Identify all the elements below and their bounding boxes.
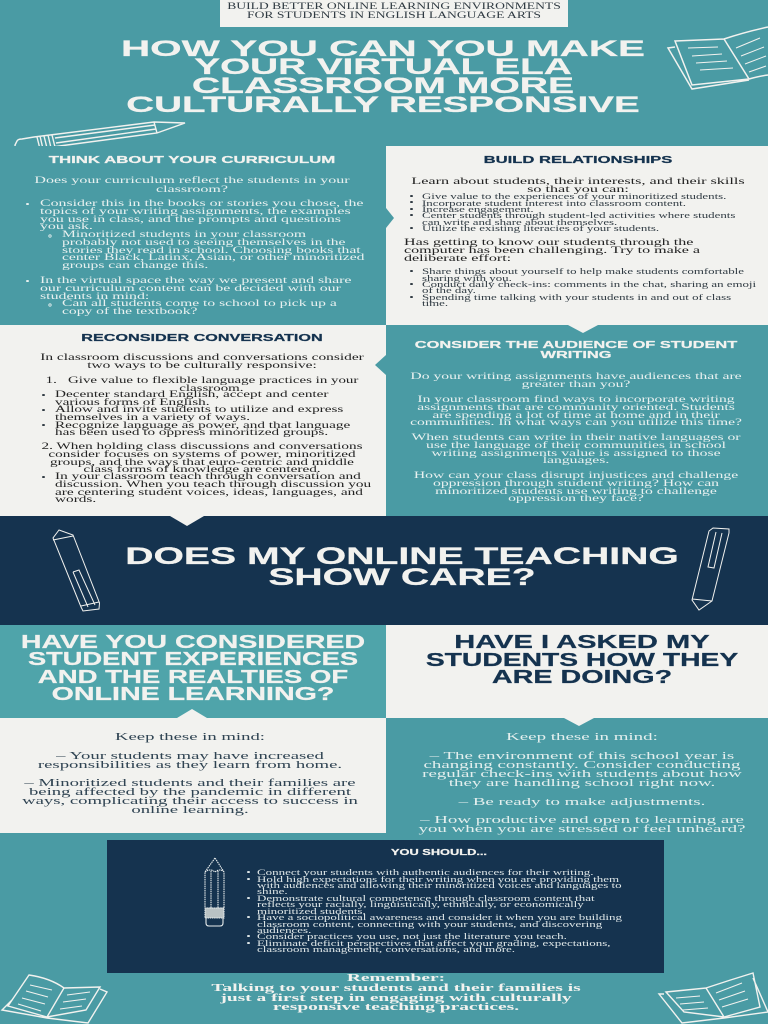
intro <box>411 177 745 195</box>
bullet list: probably not used to seeing themselves in the <box>62 238 345 248</box>
text: getting to know <box>404 238 700 264</box>
paragraph 4: oppression through student writing? How can <box>433 479 719 489</box>
paragraph 4: How can your class disrupt injustices and challenge <box>414 471 738 481</box>
title: HOW YOU CAN YOU MAKE <box>121 36 645 61</box>
bullet list: In the virtual space the way we present and share <box>40 276 351 286</box>
panel: you should <box>107 840 664 973</box>
heading: CONSIDER THE AUDIENCE OF STUDENT <box>415 339 737 351</box>
heading: WRITING <box>541 348 611 360</box>
text: getting to know: computer has been challenging. Try to make a <box>404 246 700 256</box>
heading: STUDENTS HOW THEY <box>426 649 738 670</box>
icon: pencil <box>204 858 225 926</box>
list: value: Incorporate student interest into classroom content. <box>422 199 686 208</box>
paragraph 4 <box>414 471 738 504</box>
point 2: online learning. <box>131 805 249 816</box>
heading: DOES MY ONLINE TEACHING <box>125 543 679 570</box>
list: language: various forms of English. <box>55 398 210 408</box>
numbered point 2: 2. When holding class discussions and conversations <box>42 442 362 452</box>
numbered point 1: 1. Give value to flexible language practices in your <box>46 376 358 386</box>
heading <box>125 543 679 591</box>
list: value: Give value to the experiences of your minoritized students. <box>422 192 726 201</box>
text: getting to know: Has getting to know our students through the <box>404 238 693 248</box>
bullet list <box>247 868 622 954</box>
list: language: themselves in a variety of ways. <box>55 413 250 423</box>
point 1: – The environment of this school year is <box>430 751 734 762</box>
bullet list: Consider this in the books or stories you chose, the <box>40 199 363 209</box>
bullet list: center Black, Latinx, Asian, or other minoritized <box>62 253 364 263</box>
point 2: ways, complicating their access to success in <box>22 796 358 807</box>
list: value: Increase engagement. <box>422 205 534 214</box>
list: value: can write and share about themselves. <box>422 218 617 227</box>
intro question <box>34 176 350 195</box>
point 2: – Be ready to make adjustments. <box>459 797 705 808</box>
banner: subtitle: BUILD BETTER ONLINE LEARNING ENVIRONMENTS <box>227 2 561 12</box>
heading: THINK ABOUT YOUR CURRICULUM <box>49 154 335 166</box>
bullet list: Have a sociopolitical awareness and consider it when you are building <box>257 913 622 922</box>
numbered point 2: groups, and the ways that euro-centric and middle <box>50 458 354 468</box>
list: teach through discussion: are centering student voices, ideas, languages, and <box>55 488 363 498</box>
heading: HAVE I ASKED MY <box>454 631 710 652</box>
panel: have I asked heading <box>386 625 768 718</box>
bullet list: with audiences and allowing their minoritized voices and languages to <box>257 881 622 890</box>
panel: build relationships <box>386 146 768 325</box>
paragraph 1: greater than you? <box>522 380 630 390</box>
intro: two ways to be culturally responsive: <box>87 361 317 371</box>
title: CLASSROOM MORE <box>192 73 574 98</box>
icon: open book bottom left <box>0 974 108 1024</box>
bullet list: Minoritized students in your classroom <box>62 230 306 240</box>
arrow: pointing down <box>568 325 598 333</box>
intro: In classroom discussions and conversations consider <box>40 353 364 363</box>
subheading: Keep these in mind: <box>115 732 265 743</box>
list: effort: Share things about yourself to help make students comfortable <box>422 267 744 276</box>
bullet list: copy of the textbook? <box>62 307 197 317</box>
bullet list: groups can change this. <box>62 261 208 271</box>
heading: AND THE REALTIES OF <box>37 666 348 687</box>
point 2: being affected by the pandemic in different <box>29 787 351 798</box>
paragraph 3: languages. <box>543 456 609 466</box>
paragraph 3: writing assignments value is assigned to those <box>431 449 721 459</box>
point 1: changing constantly. Consider conducting <box>424 760 740 771</box>
subheading: Keep these in mind: <box>506 732 658 743</box>
intro question: Does your curriculum reflect the students in your <box>34 176 350 186</box>
bullet list: stories they read in school. Choosing books that <box>62 246 361 256</box>
list: effort: of the day. <box>422 286 476 295</box>
list: value: Utilize the existing literacies of your students. <box>422 224 659 233</box>
paragraph 2 <box>410 395 742 428</box>
text: remember: Talking to your students and their families is <box>211 983 581 994</box>
title <box>121 36 645 117</box>
list: effort <box>410 267 756 308</box>
icon: open book top right <box>666 26 768 90</box>
point 1: – Your students may have increased <box>56 751 324 762</box>
bullet list: audiences. <box>257 926 311 935</box>
heading: ONLINE LEARNING? <box>51 683 334 704</box>
intro: so that you can: <box>527 185 629 195</box>
heading: HAVE YOU CONSIDERED <box>20 631 365 652</box>
bullet list: classroom management, conversations, and more. <box>257 945 515 954</box>
title: CULTURALLY RESPONSIVE <box>126 92 640 117</box>
list: teach through discussion <box>42 472 371 505</box>
arrow: pointing left <box>375 355 386 375</box>
banner: subtitle: FOR STUDENTS IN ENGLISH LANGUAGE ARTS <box>247 11 541 21</box>
text: remember <box>211 973 581 1013</box>
panel: consider the audience <box>386 325 768 516</box>
paragraph 2: assignments that are community oriented. Students <box>417 403 735 413</box>
paragraph 3: use the language of their communities in school <box>426 441 726 451</box>
bullet list: classroom content, connecting with your students, and discovering <box>257 920 602 929</box>
paragraph 3: When students can write in their native languages or <box>411 433 741 443</box>
bullet list: Connect your students with authentic audiences for their writing. <box>257 868 594 877</box>
point 2 <box>22 778 358 816</box>
heading: BUILD RELATIONSHIPS <box>484 154 672 166</box>
paragraph 2: are spending a lot of time at home and in their <box>432 411 720 421</box>
arrow: pointing up <box>177 709 207 718</box>
heading <box>415 339 738 360</box>
paragraph 4: oppression they face? <box>508 494 644 504</box>
list: effort: Conduct daily check-ins: comments in the chat, sharing an emoji <box>422 280 756 289</box>
intro <box>40 353 364 371</box>
bullet list: reflects your racially, linguistically, ethnically, or economically <box>257 900 584 909</box>
point 1: they are handling school right now. <box>449 778 715 789</box>
paragraph 1 <box>410 372 742 390</box>
heading: YOU SHOULD... <box>391 848 487 857</box>
panel: keep these in mind right <box>386 718 768 835</box>
bullet list: shine. <box>257 887 288 896</box>
list: language: Recognize language as power, and that language <box>55 421 350 431</box>
panel: keep these in mind left <box>0 718 386 833</box>
paragraph 1: Do your writing assignments have audiences that are <box>410 372 742 382</box>
list: effort: sharing with you. <box>422 274 512 283</box>
text: getting to know: deliberate effort: <box>404 254 511 264</box>
heading: STUDENT EXPERIENCES <box>27 648 358 669</box>
title: YOUR VIRTUAL ELA <box>194 54 572 79</box>
text: remember: Remember: <box>347 973 445 984</box>
heading: SHOW CARE? <box>268 564 536 591</box>
numbered point 2 <box>42 442 362 475</box>
point 3: you when you are stressed or feel unheard? <box>419 824 745 835</box>
numbered point 1: classroom. <box>179 384 244 394</box>
intro: Learn about students, their interests, and their skills <box>411 177 745 187</box>
panel: reconsider conversation <box>0 325 386 516</box>
paragraph 3 <box>411 433 741 466</box>
list: language: Decenter standard English, accept and center <box>55 390 328 400</box>
bullet list <box>26 199 364 317</box>
arrow: pointing right <box>386 208 394 228</box>
bullet list: you ask. <box>40 222 93 232</box>
bullet list: Can all students come to school to pick up a <box>62 299 337 309</box>
list: value: Center students through student-led activities where students <box>422 211 735 220</box>
band: does my online teaching show care <box>0 516 768 625</box>
list: teach through discussion: words. <box>55 495 96 505</box>
list: effort: time. <box>422 299 448 308</box>
point 2: – Minoritized students and their families are <box>24 778 356 789</box>
bullet list: Demonstrate cultural competence through classroom content that <box>257 894 595 903</box>
paragraph 4: minoritized students use writing to challenge <box>435 487 717 497</box>
point 3: – How productive and open to learning are <box>420 815 744 826</box>
heading: ARE DOING? <box>492 666 672 687</box>
list: teach through discussion: discussion. When you teach through discussion you <box>55 480 371 490</box>
heading <box>20 631 365 704</box>
banner: subtitle <box>220 0 568 27</box>
list: effort: Spending time talking with your students in and out of class <box>422 293 731 302</box>
point 1: regular check-ins with students about how <box>422 769 742 780</box>
panel: think about your curriculum <box>0 146 386 325</box>
point 1 <box>38 751 342 771</box>
bullet list: you use in class, and the prompts and questions <box>40 215 341 225</box>
panel: have you considered heading <box>0 625 386 718</box>
point 1: responsibilities as they learn from home. <box>38 760 342 771</box>
point 1 <box>422 751 742 789</box>
text: remember: just a first step in engaging with culturally <box>220 993 572 1004</box>
numbered point 2: class forms of knowledge are centered. <box>83 465 321 475</box>
icon: pen left <box>52 529 100 612</box>
list: language: has been used to oppress minoritized groups. <box>55 428 328 438</box>
list: language: Allow and invite students to utilize and express <box>55 405 343 415</box>
point 3 <box>418 815 745 835</box>
bullet list: our curriculum content can be decided with our <box>40 284 341 294</box>
bullet list: Eliminate deficit perspectives that affect your grading, expectations, <box>257 939 611 948</box>
heading: RECONSIDER CONVERSATION <box>81 332 323 344</box>
bullet list: Hold high expectations for their writing when you are providing them <box>257 875 619 884</box>
arrow: pointing down <box>564 718 594 726</box>
intro question: classroom? <box>156 185 228 195</box>
bullet list: Consider practices you use, not just the literature you teach. <box>257 932 567 941</box>
icon: pen right <box>692 528 730 611</box>
icon: pencil top left <box>14 121 186 146</box>
paragraph 2: In your classroom find ways to incorporate writing <box>417 395 735 405</box>
arrow: pointing down <box>170 516 204 526</box>
list: teach through discussion: In your classroom teach through conversation and <box>55 472 361 482</box>
numbered point 2: consider focuses on systems of power, minoritized <box>48 450 356 460</box>
paragraph 2: communities. In what ways can you utilize this time? <box>410 418 742 428</box>
heading <box>426 631 738 687</box>
bullet list: minoritized students. <box>257 907 366 916</box>
bullet list: topics of your writing assignments, the examples <box>40 207 351 217</box>
list: value <box>410 192 735 233</box>
text: remember: responsive teaching practices. <box>273 1002 519 1013</box>
bullet list: students in mind: <box>40 292 149 302</box>
numbered point 1 <box>46 376 358 394</box>
icon: open book bottom right <box>658 972 768 1024</box>
list: language <box>42 390 350 438</box>
